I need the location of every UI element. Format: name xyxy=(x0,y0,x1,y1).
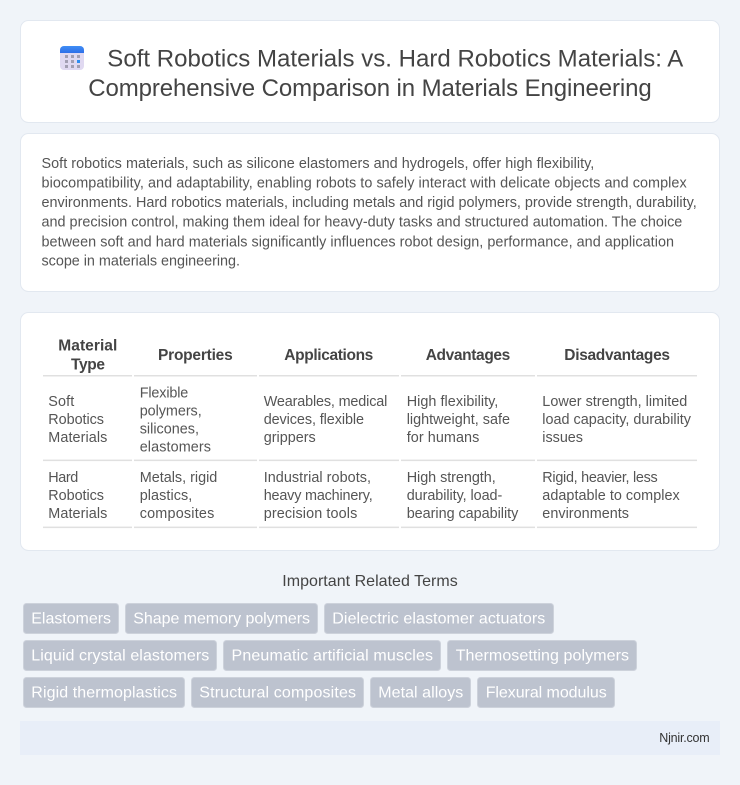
row: hard robotics materials: Metals, rigid xyxy=(140,470,217,486)
tag: structural composites xyxy=(192,678,364,708)
heading: Comprehensive Comparison in Materials Engineering xyxy=(88,75,652,102)
row: hard robotics materials: Hard xyxy=(48,470,78,486)
tag: liquid crystal elastomers xyxy=(24,640,216,670)
row: soft robotics materials: Robotics xyxy=(48,412,104,428)
row: soft robotics materials: Soft xyxy=(48,394,74,410)
tag: thermosetting polymers: Thermosetting polymers xyxy=(456,648,629,664)
row: hard robotics materials: Robotics xyxy=(48,488,104,504)
footer xyxy=(20,721,720,755)
row: soft robotics materials: devices, flexible xyxy=(264,412,364,428)
text block: summary paragraph: and precision control, making them ideal for heavy-duty tasks and structured automation. The choice xyxy=(42,214,682,230)
row: hard robotics materials: adaptable to complex xyxy=(542,488,680,504)
row: soft robotics materials: grippers xyxy=(264,430,316,446)
tag: shape memory polymers: Shape memory polymers xyxy=(133,610,310,628)
row: soft robotics materials: High flexibility, xyxy=(407,394,498,410)
panel: summary xyxy=(20,134,720,292)
row: hard robotics materials: composites xyxy=(140,506,214,522)
row: hard robotics materials: bearing capability xyxy=(407,506,519,522)
table header: Properties xyxy=(158,347,233,364)
tag: dielectric elastomer actuators: Dielectric elastomer actuators xyxy=(332,610,545,628)
tag: elastomers xyxy=(24,604,118,634)
row: soft robotics materials: load capacity, durability xyxy=(542,412,692,428)
row: soft robotics materials: Flexible xyxy=(140,385,188,401)
row: soft robotics materials: Wearables, medical xyxy=(264,394,387,410)
row: soft robotics materials: Materials xyxy=(48,430,107,446)
row: soft robotics materials: for humans xyxy=(407,430,479,446)
row: hard robotics materials: Rigid, heavier, less xyxy=(542,470,658,486)
table header: Advantages xyxy=(426,347,510,364)
table header xyxy=(58,338,670,374)
tag: structural composites: Structural composites xyxy=(199,684,356,702)
table header: Applications xyxy=(284,347,373,364)
row: hard robotics materials: environments xyxy=(542,506,629,522)
text block: summary paragraph: biocompatibility, and adaptability, enabling robots to safely interact with delicate objects and complex xyxy=(42,176,687,192)
tag: rigid thermoplastics: Rigid thermoplastics xyxy=(31,684,177,702)
row: hard robotics materials: heavy machinery, xyxy=(264,488,373,504)
table header: Disadvantages xyxy=(564,347,670,364)
panel: title xyxy=(20,20,720,122)
icon: calendar xyxy=(60,46,84,70)
tag: rigid thermoplastics xyxy=(24,678,184,708)
row: soft robotics materials: Lower strength, limited xyxy=(542,394,687,410)
tag list: related terms xyxy=(24,604,636,708)
tag: pneumatic artificial muscles: Pneumatic artificial muscles xyxy=(232,648,433,664)
text block: summary paragraph: between soft and hard materials significantly influences robot design, performance, and application xyxy=(42,234,674,250)
heading: important related terms: Important Related Terms xyxy=(282,573,458,590)
text block: summary paragraph xyxy=(42,156,697,270)
row: soft robotics materials: issues xyxy=(542,430,583,446)
text block: summary paragraph: environments. Hard robotics materials, including metals and rigid polymers, provide strength, durability, xyxy=(42,195,697,211)
tag: flexural modulus xyxy=(478,678,614,708)
heading: Soft Robotics Materials vs. Hard Robotics Materials: A xyxy=(107,46,683,72)
footer credit: Njnir.com xyxy=(659,731,710,745)
row: soft robotics materials: lightweight, safe xyxy=(407,412,510,428)
row: soft robotics materials: elastomers xyxy=(140,439,211,455)
tag: metal alloys xyxy=(370,678,470,708)
tag: metal alloys: Metal alloys xyxy=(378,684,463,702)
row: soft robotics materials: polymers, xyxy=(140,403,202,419)
row: hard robotics materials: durability, load- xyxy=(407,488,503,504)
tag: shape memory polymers xyxy=(126,604,318,634)
row: hard robotics materials xyxy=(48,470,680,522)
tag: dielectric elastomer actuators xyxy=(324,604,554,634)
panel: comparison table xyxy=(20,312,720,550)
row: hard robotics materials: Industrial robots, xyxy=(264,470,371,486)
heading xyxy=(88,46,683,102)
tag: flexural modulus: Flexural modulus xyxy=(486,684,607,702)
row: hard robotics materials: Materials xyxy=(48,506,107,522)
row: soft robotics materials xyxy=(48,385,692,455)
table header: Material xyxy=(58,338,117,355)
tag: pneumatic artificial muscles xyxy=(224,640,440,670)
row: hard robotics materials: High strength, xyxy=(407,470,496,486)
table header: Type xyxy=(71,356,105,374)
tag: elastomers: Elastomers xyxy=(31,610,111,628)
row: hard robotics materials: precision tools xyxy=(264,506,357,522)
text block: summary paragraph: Soft robotics materials, such as silicone elastomers and hydrogels, offer high flexibility, xyxy=(42,156,594,172)
row: soft robotics materials: silicones, xyxy=(140,421,199,437)
tag: thermosetting polymers xyxy=(448,640,636,670)
text block: summary paragraph: scope in materials engineering. xyxy=(42,254,240,270)
tag: liquid crystal elastomers: Liquid crystal elastomers xyxy=(31,648,209,664)
row: hard robotics materials: plastics, xyxy=(140,488,192,504)
